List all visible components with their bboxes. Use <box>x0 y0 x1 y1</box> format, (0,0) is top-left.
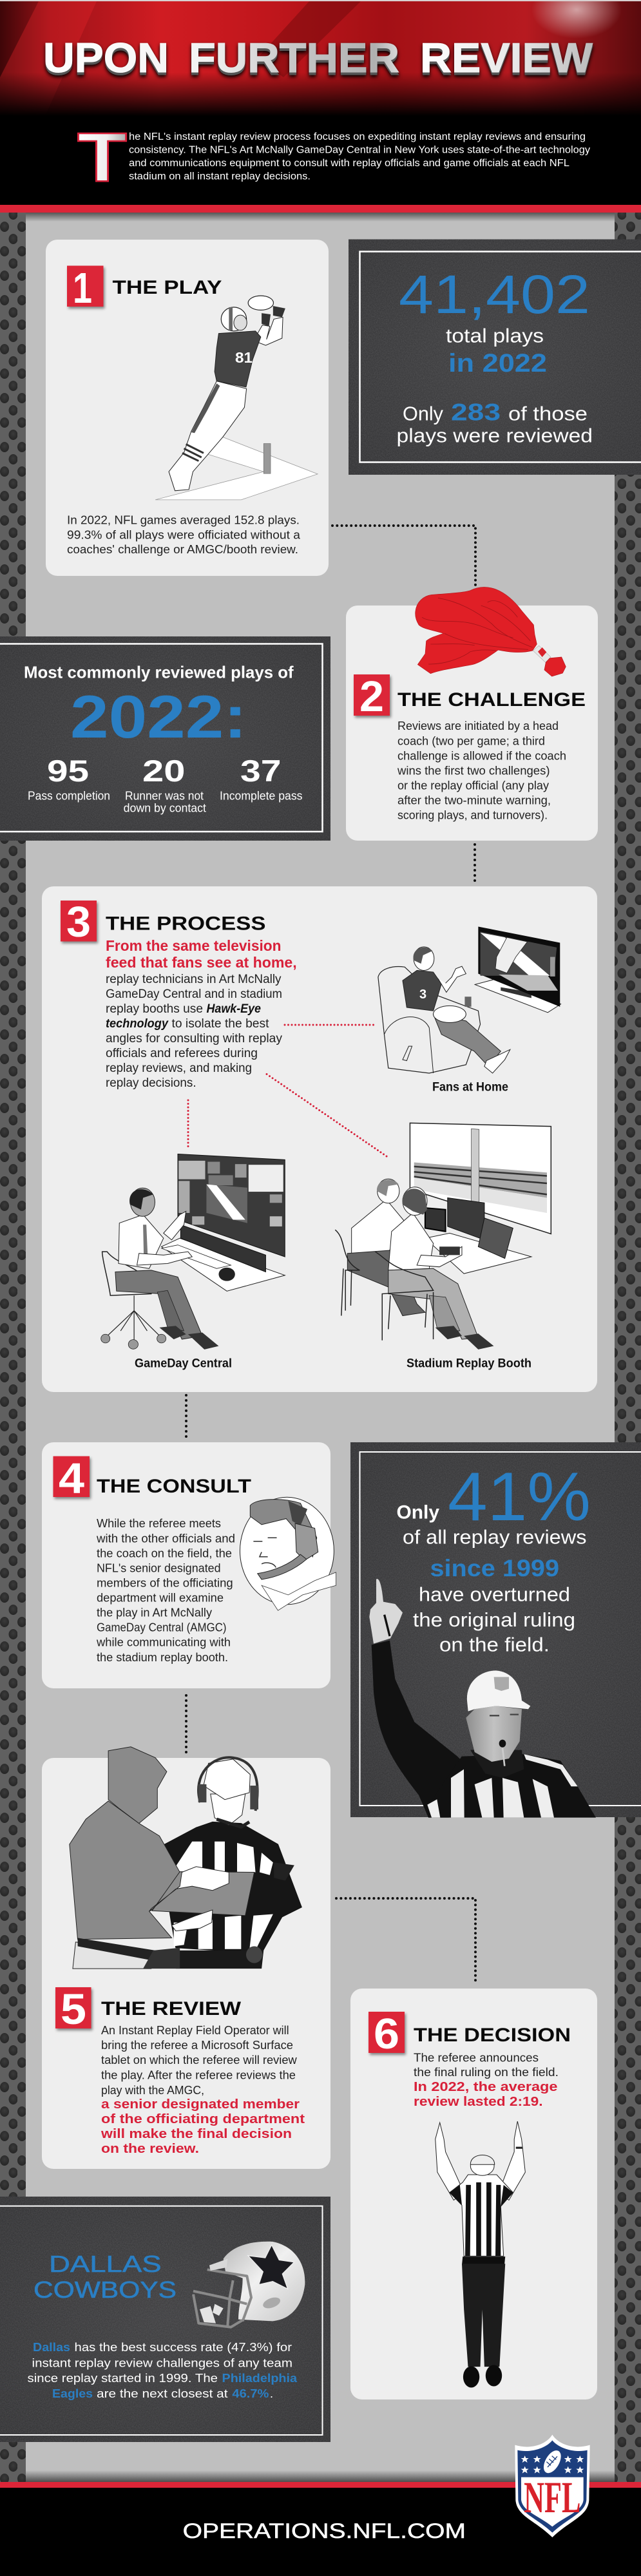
body text <box>106 973 283 1090</box>
body text: An Instant Replay Field Operator will <box>101 2024 289 2037</box>
red emphasis text: on the review. <box>101 2142 199 2156</box>
illustration: referee touchdown signal <box>435 2121 525 2387</box>
body text: coach (two per game; a third <box>397 734 545 747</box>
body text: play with the AMGC, <box>101 2084 204 2097</box>
body text: In 2022, NFL games averaged 152.8 plays. <box>67 514 300 527</box>
red emphasis text: will make the final decision <box>100 2127 292 2141</box>
body text: are the next closest at <box>97 2387 228 2400</box>
stat: 41,402: 41,402 <box>399 264 590 325</box>
body text: angles for consulting with replay <box>106 1032 283 1045</box>
red emphasis text: of the officiating department <box>101 2112 305 2126</box>
body text: 46.7% <box>232 2387 269 2400</box>
body text: the play in Art McNally <box>97 1606 212 1619</box>
icon: cowboys helmet <box>193 2242 305 2327</box>
badge 1: 1 <box>73 264 92 312</box>
red emphasis text: a senior designated member <box>101 2097 300 2112</box>
caption: of all replay reviews: the original ruling <box>413 1608 575 1631</box>
badge 4: 4 <box>59 1455 84 1503</box>
stat: 95 pass completion: 95 <box>47 754 89 788</box>
body text: GameDay Central (AMGC) <box>97 1621 227 1634</box>
connector: play to challenge <box>332 526 475 585</box>
stat: only 283 <box>397 399 593 447</box>
stat: 20 runner not down <box>124 754 206 815</box>
body text: bring the referee a Microsoft Surface <box>101 2039 293 2052</box>
footer url: OPERATIONS.NFL.COM <box>183 2519 466 2543</box>
heading: dallas cowboys: DALLAS <box>49 2251 162 2277</box>
intro text: stadium on all instant replay decisions. <box>129 171 311 182</box>
body text: the stadium replay booth. <box>97 1651 228 1664</box>
panel: the decision <box>350 1989 597 2399</box>
connector: process to consult <box>185 1395 187 1440</box>
stat: 20 runner not down: Runner was not <box>125 790 204 803</box>
stat: 95 pass completion <box>28 754 110 803</box>
body text: tablet on which the referee will review <box>101 2054 298 2066</box>
heading: dallas cowboys: COWBOYS <box>33 2276 177 2303</box>
header banner <box>0 0 641 213</box>
stat: 37 incomplete pass <box>220 754 303 803</box>
panel: the review <box>42 1747 330 2169</box>
body text <box>101 2024 298 2097</box>
body text: review lasted 2:19. <box>414 2095 543 2109</box>
intro text: consistency. The NFL's Art McNally GameDay Central in New York uses state-of-the-art technology <box>129 144 590 156</box>
badge 6: 6 <box>374 2010 399 2058</box>
panel: most commonly reviewed plays <box>0 636 330 841</box>
caption: of all replay reviews: have overturned <box>419 1583 570 1606</box>
title <box>43 34 593 81</box>
caption: gameday central: GameDay Central <box>135 1357 232 1371</box>
body text: replay booths use <box>106 1002 203 1016</box>
label: total plays: total plays <box>446 325 544 347</box>
label: in 2022: in 2022 <box>448 349 547 377</box>
badge 5: 5 <box>61 1985 86 2034</box>
drop cap T: T <box>77 118 127 196</box>
illustration: gameday central <box>101 1154 285 1350</box>
jersey number: 81 <box>235 349 253 366</box>
heading: the challenge: THE CHALLENGE <box>397 689 586 711</box>
body text: the play. After the referee reviews the <box>101 2069 296 2082</box>
icon: NFL shield logo <box>515 2435 590 2537</box>
body text: members of the officiating <box>97 1577 233 1590</box>
stat: 37 incomplete pass: Incomplete pass <box>220 790 303 803</box>
body text: wins the first two challenges) <box>397 764 550 777</box>
badge 1 <box>67 264 103 312</box>
footer band <box>0 2482 641 2576</box>
red divider top <box>0 205 641 213</box>
red connector to stadium booth <box>267 1074 388 1158</box>
heading: the review: THE REVIEW <box>101 1998 242 2019</box>
stat: 20 runner not down: 20 <box>142 754 186 788</box>
body text: While the referee meets <box>97 1517 221 1530</box>
connector: challenge to process <box>474 844 476 886</box>
lead text in red: From the same television <box>106 937 281 954</box>
body text: Dallas <box>33 2341 70 2354</box>
heading: the process: THE PROCESS <box>106 913 265 935</box>
body text: NFL's senior designated <box>97 1561 221 1574</box>
panel: 41,402 total plays <box>349 240 641 475</box>
body text: replay decisions. <box>106 1076 196 1090</box>
title: REVIEW <box>420 34 593 81</box>
body text: Reviews are initiated by a head <box>397 720 559 732</box>
badge 3 <box>61 898 97 946</box>
icon: NFL shield logo: NFL <box>524 2473 580 2522</box>
body text: the final ruling on the field. <box>414 2066 559 2079</box>
body text: the coach on the field, the <box>97 1547 232 1560</box>
body text: since replay started in 1999. The <box>27 2372 218 2385</box>
body text <box>96 1517 235 1664</box>
body text: instant replay review challenges of any team <box>32 2356 292 2369</box>
panel: 41 percent <box>350 1442 641 1818</box>
body text: department will examine <box>97 1591 224 1604</box>
stat: 95 pass completion: Pass completion <box>28 790 110 803</box>
stat: only 283: plays were reviewed <box>397 425 593 447</box>
body text: or the replay official (any play <box>397 779 549 792</box>
heading: the consult: THE CONSULT <box>97 1476 251 1497</box>
body text: The referee announces <box>414 2051 539 2064</box>
connector: consult to review <box>185 1695 187 1753</box>
body text: Philadelphia <box>222 2372 298 2385</box>
illustration: receiver catching ball <box>155 296 318 500</box>
body text: 99.3% of all plays were officiated without a <box>67 528 301 541</box>
title: FURTHER <box>189 34 399 81</box>
stat: only 283: 283 <box>451 399 501 426</box>
body text: after the two-minute warning, <box>397 794 551 806</box>
heading: the play: THE PLAY <box>112 277 222 298</box>
intro text <box>129 131 590 182</box>
body text: officials and referees during <box>106 1047 258 1060</box>
body text: GameDay Central and in stadium <box>106 987 282 1001</box>
illustration: fan at home <box>378 926 561 1073</box>
body text <box>397 720 566 822</box>
caption: fans at home: Fans at Home <box>432 1081 508 1094</box>
referee photo <box>369 1579 596 1818</box>
caption: stadium replay booth: Stadium Replay Booth <box>407 1357 531 1371</box>
stat: only 41 percent: Only <box>397 1502 439 1523</box>
caption: of all replay reviews: of all replay reviews <box>403 1525 586 1548</box>
illustration: official handing tablet to referee <box>70 1747 301 1969</box>
panel: the play <box>46 240 329 576</box>
caption: of all replay reviews: on the field. <box>439 1634 550 1656</box>
title: UPON <box>43 34 169 81</box>
stat: 20 runner not down: down by contact <box>124 802 206 815</box>
connector: review to decision <box>336 1898 475 1985</box>
body text: Eagles <box>52 2387 93 2400</box>
panel: dallas cowboys <box>0 2197 330 2442</box>
body text: challenge is allowed if the coach <box>397 750 566 763</box>
body text <box>414 2051 559 2109</box>
body text: replay reviews, and making <box>106 1062 252 1075</box>
red emphasis text <box>100 2097 305 2156</box>
caption: of all replay reviews: since 1999 <box>430 1555 559 1581</box>
body text: while communicating with <box>96 1636 231 1649</box>
lead text in red <box>106 937 297 971</box>
panel: the consult <box>42 1442 336 1688</box>
body text: . <box>270 2387 273 2400</box>
body text <box>27 2341 298 2400</box>
illustration: official with headset <box>240 1497 336 1610</box>
badge 4 <box>53 1455 90 1503</box>
intro text: he NFL's instant replay review process focuses on expediting instant replay reviews and ensuring <box>129 131 586 142</box>
body text: replay technicians in Art McNally <box>106 973 282 986</box>
body text: with the other officials and <box>96 1532 235 1545</box>
body text: coaches' challenge or AMGC/booth review. <box>67 543 298 556</box>
badge 6 <box>368 2010 405 2058</box>
badge 3: 3 <box>66 898 91 946</box>
panel: the challenge <box>346 587 598 841</box>
badge 2: 2 <box>359 673 384 721</box>
stat: only 283: of those <box>508 403 588 425</box>
badge 5 <box>55 1985 91 2034</box>
heading: Most commonly reviewed plays of <box>24 663 294 682</box>
illustration: stadium replay booth <box>335 1123 551 1350</box>
stat: only 41 percent: 41% <box>448 1458 591 1535</box>
body text <box>67 514 301 556</box>
red connector to fans at home <box>285 1024 374 1026</box>
body text: technology <box>106 1017 169 1031</box>
stat: 37 incomplete pass: 37 <box>240 754 281 788</box>
body text: to isolate the best <box>171 1017 269 1031</box>
lead text in red: feed that fans see at home, <box>106 954 297 971</box>
stat: 2022: 2022: <box>70 683 247 750</box>
red connector to gameday central <box>187 1100 189 1147</box>
stat: only 283: Only <box>403 403 443 425</box>
badge 2 <box>354 673 390 721</box>
intro text: and communications equipment to consult with replay officials and game officials at each NFL <box>129 158 569 169</box>
body text: has the best success rate (47.3%) for <box>75 2341 292 2354</box>
heading: dallas cowboys <box>33 2251 177 2303</box>
body text: scoring plays, and turnovers). <box>397 809 548 822</box>
panel: the process <box>42 886 597 1392</box>
caption: of all replay reviews <box>403 1525 586 1656</box>
body text: In 2022, the average <box>414 2080 558 2094</box>
heading: the decision: THE DECISION <box>414 2025 571 2046</box>
jersey number 3: 3 <box>419 987 426 1002</box>
icon: challenge flag <box>416 587 566 676</box>
body text: Hawk-Eye <box>206 1002 261 1016</box>
